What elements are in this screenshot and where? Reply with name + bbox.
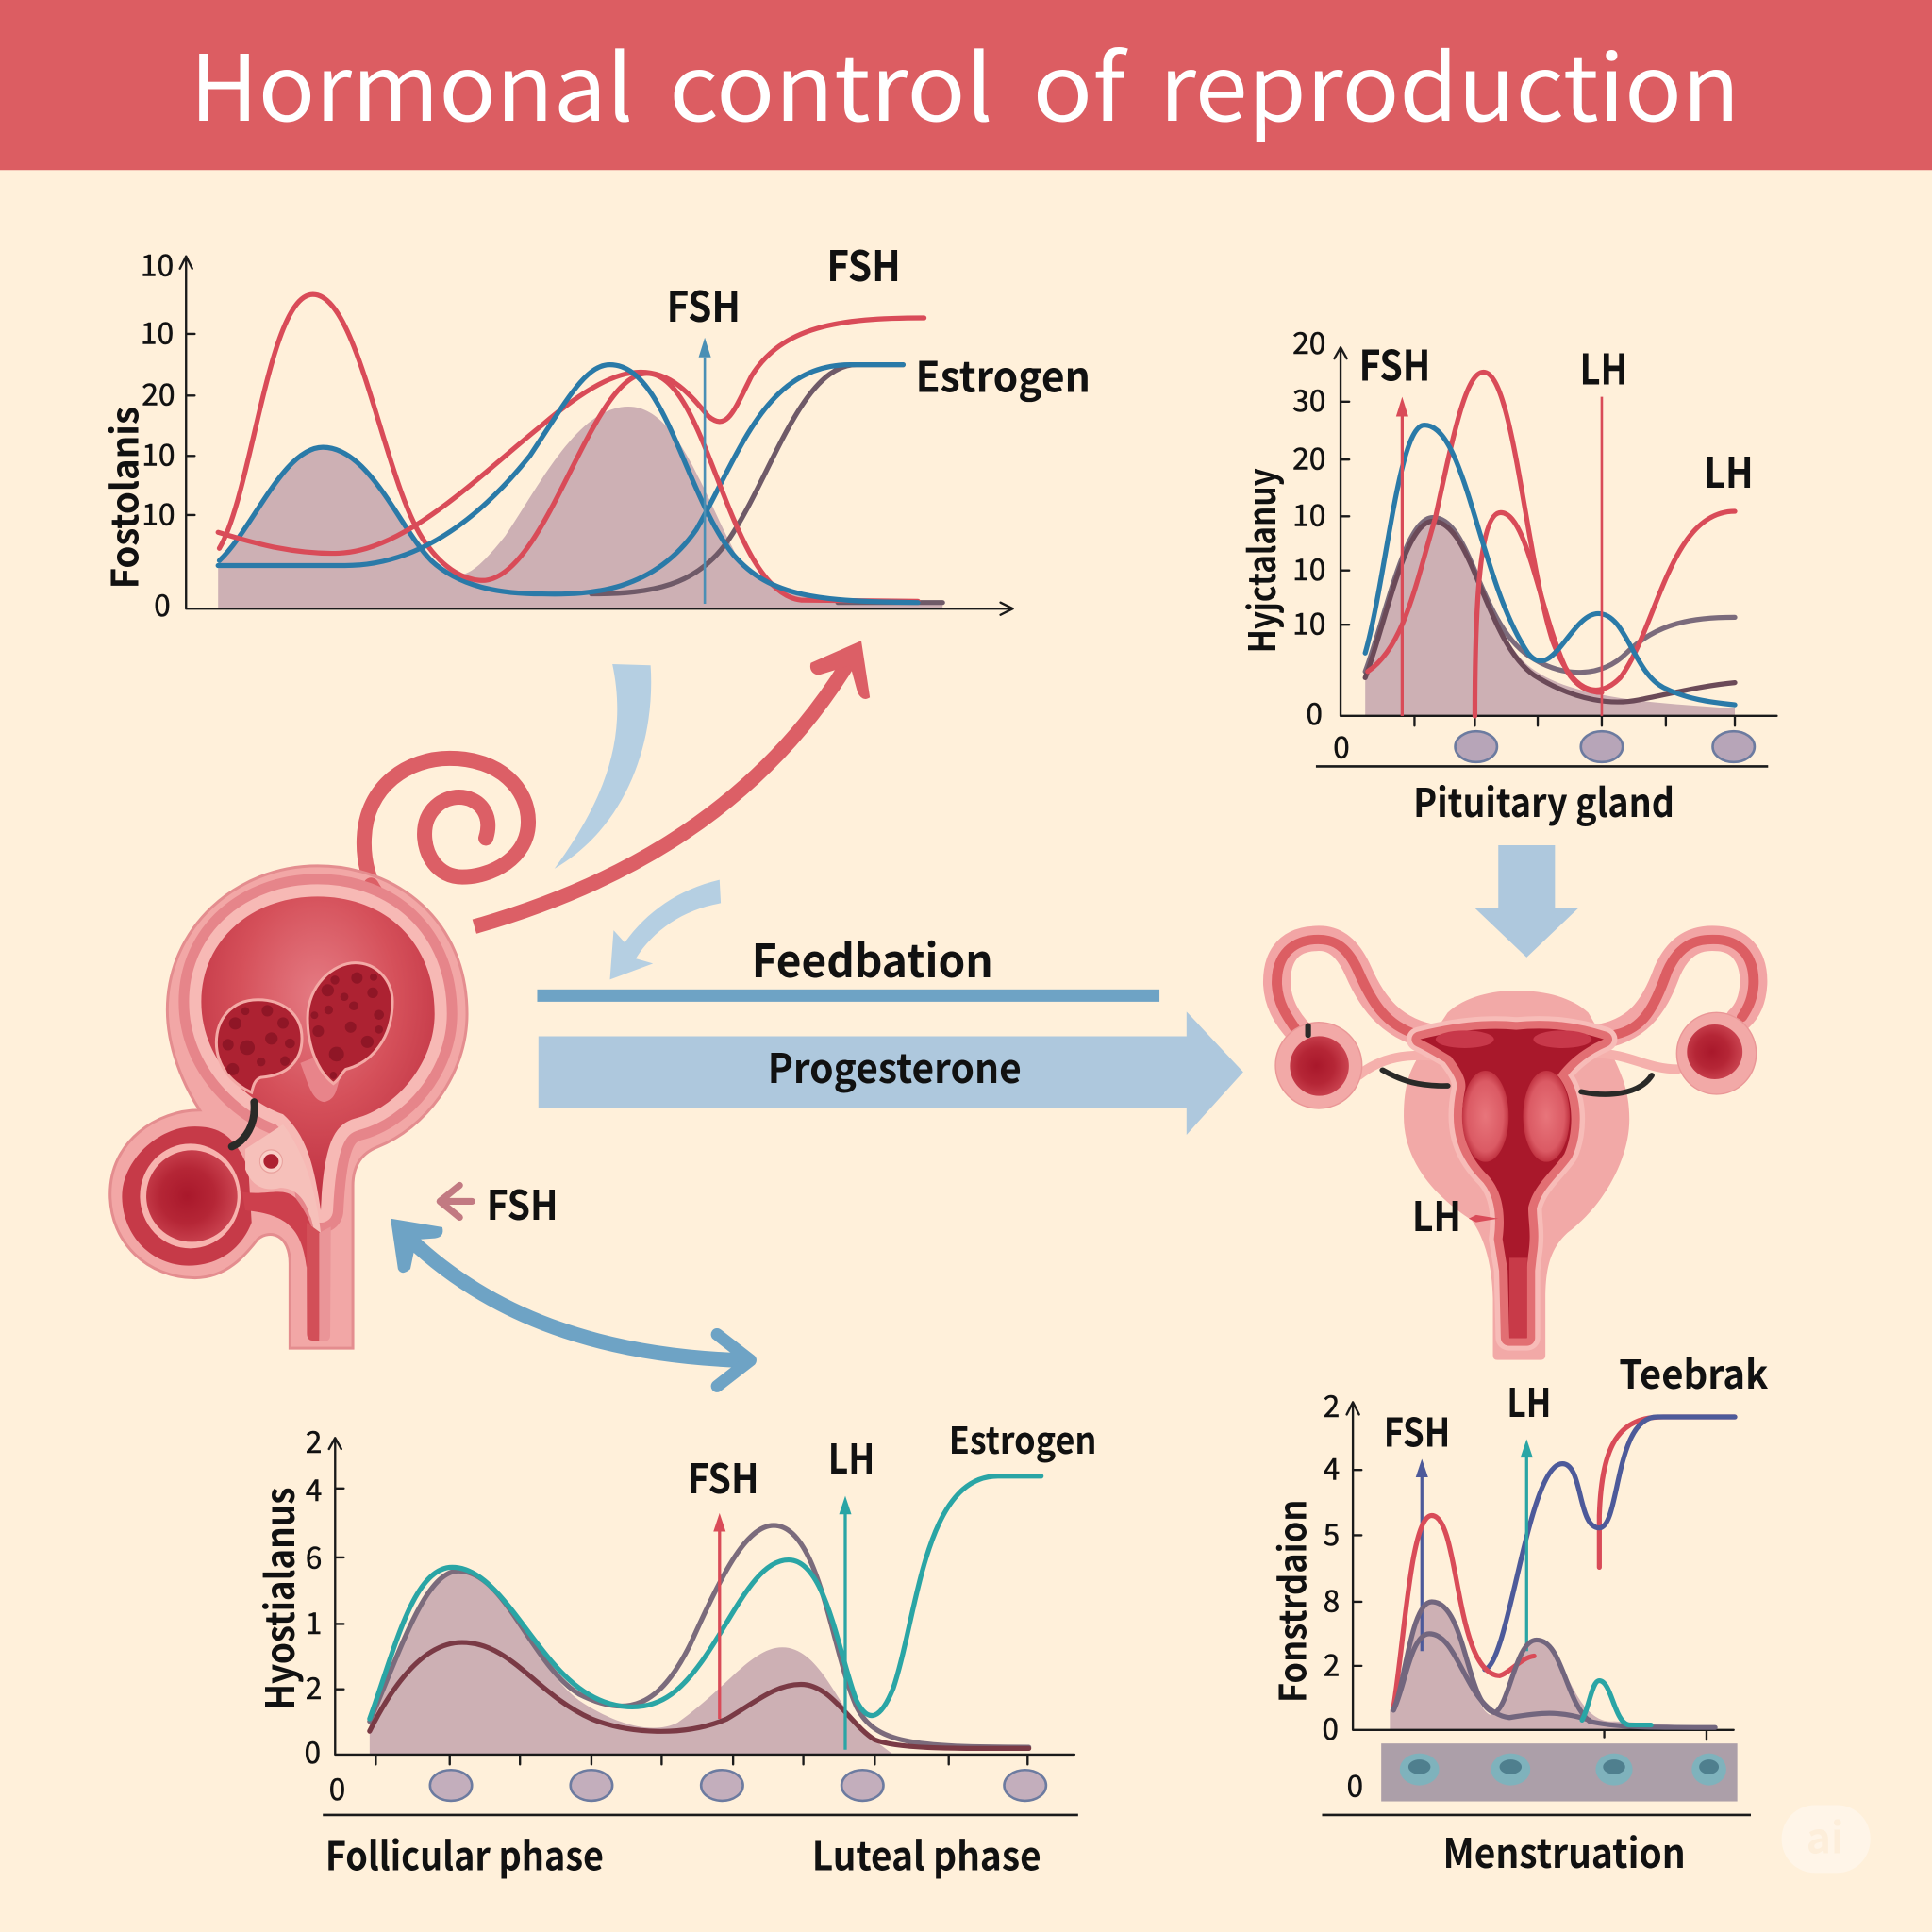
connecting tissue (242, 1191, 314, 1268)
chart: top right pituitary gland curves: 10 (1292, 547, 1325, 590)
title banner: of (1033, 15, 1128, 147)
chart: bottom right menstruation: 5 (1324, 1512, 1340, 1555)
left lobe with follicles (216, 1000, 302, 1092)
icon: dark connectors (1308, 1025, 1652, 1094)
chart: top right pituitary gland curves: FSH (1359, 332, 1430, 393)
canal (307, 1223, 321, 1341)
chart: top right pituitary gland curves: 0 (1306, 691, 1323, 734)
arrow: blue double-headed curve (391, 1219, 750, 1386)
uterus outer body (1404, 991, 1629, 1360)
chart: bottom right menstruation: 8 (1324, 1578, 1340, 1621)
chart: bottom right menstruation: Fonstrdaion (1264, 1500, 1317, 1703)
title banner: reproduction (1159, 15, 1740, 147)
uterine cavity (201, 896, 435, 1210)
endometrial lobes (1462, 1071, 1508, 1162)
chart: top left hormone curves: FSH (667, 273, 741, 334)
chart: top left hormone curves: 10 (141, 310, 174, 353)
chart: top right pituitary gland curves: LH (1704, 439, 1754, 500)
chart: top right pituitary gland curves: 0 (1333, 724, 1350, 767)
watermark badge: ai (1807, 1804, 1844, 1865)
chart: bottom left follicular and luteal phase: Estrogen (949, 1412, 1096, 1465)
ligaments (1358, 1054, 1677, 1075)
icon: spiral tube (364, 758, 528, 897)
arrow: Progesterone block arrow (539, 1011, 1243, 1135)
arrow: Progesterone block arrow: Progesterone (768, 1037, 1022, 1095)
uterine wall layers (1420, 1028, 1604, 1338)
title banner (0, 0, 1932, 170)
label: Feedbation with bar (537, 924, 1159, 1002)
chart: bottom right menstruation: 4 (1324, 1447, 1340, 1490)
chart: top left hormone curves: 0 (154, 583, 171, 625)
chart: top right pituitary gland curves: Hyjctalanuy (1234, 468, 1287, 653)
chart: top right pituitary gland curves: 30 (1292, 378, 1325, 421)
uterine cavity (1420, 1028, 1604, 1338)
label: FSH with small arrow: FSH (487, 1174, 558, 1232)
title banner: Hormonal (190, 15, 633, 147)
chart: top left hormone curves: Estrogen (915, 342, 1091, 404)
chart: bottom right menstruation: FSH (1384, 1402, 1450, 1458)
chart: bottom right menstruation: 0 (1347, 1763, 1363, 1806)
right lobe with follicles (308, 963, 392, 1084)
icon: dark connector (232, 1102, 255, 1146)
chart: bottom left follicular and luteal phase: FSH (688, 1447, 759, 1506)
chart: bottom left follicular and luteal phase: LH (828, 1427, 874, 1486)
chart: bottom right menstruation (1264, 1344, 1768, 1880)
chart: top left hormone curves: 20 (142, 373, 175, 415)
arrow: red curved arrow to top chart (475, 641, 870, 926)
chart: top left hormone curves: 10 (142, 491, 175, 534)
label: FSH with small arrow (440, 1174, 558, 1232)
chart: bottom right menstruation: 2 (1324, 1642, 1340, 1685)
arrow: small light blue feedback arrow (610, 880, 721, 979)
right ovary (1676, 1012, 1757, 1094)
chart: bottom left follicular and luteal phase: 0 (329, 1767, 345, 1809)
chart: top left hormone curves (96, 232, 1091, 625)
chart: bottom right menstruation: Teebrak (1619, 1344, 1768, 1401)
label: LH with small arrow: LH (1412, 1185, 1461, 1243)
chart: bottom left follicular and luteal phase: 0 (305, 1730, 321, 1773)
chart: top left hormone curves: Fostolanis (96, 407, 149, 589)
chart: top right pituitary gland curves: 20 (1292, 437, 1325, 479)
chart: bottom right menstruation: 0 (1322, 1707, 1339, 1749)
chart: top right pituitary gland curves: LH (1579, 336, 1627, 397)
chart: top left hormone curves: 10 (141, 243, 174, 286)
chart: bottom left follicular and luteal phase: 1 (306, 1601, 322, 1643)
chart: bottom right menstruation: LH (1507, 1373, 1551, 1429)
chart: bottom left follicular and luteal phase: Luteal phase (812, 1826, 1041, 1883)
chart: top right pituitary gland curves: 10 (1292, 602, 1325, 644)
spiral tube root over wall (371, 885, 385, 902)
arrow: light blue swoosh (555, 664, 651, 869)
chart: top right pituitary gland curves: Pituitary gland (1413, 773, 1674, 829)
band with cells (1381, 1743, 1738, 1802)
chart: top right pituitary gland curves: 20 (1292, 321, 1325, 363)
chart: top left hormone curves: 10 (142, 433, 175, 475)
label: LH with small arrow (1412, 1185, 1498, 1243)
chart: bottom right menstruation: 2 (1324, 1384, 1340, 1426)
arrow: down block arrow (1474, 845, 1578, 958)
left ovary (1275, 1023, 1362, 1108)
title banner: control (669, 15, 993, 147)
chart: top right pituitary gland curves: 10 (1292, 493, 1325, 536)
chart: top left hormone curves: FSH (826, 232, 901, 293)
label: Feedbation with bar: Feedbation (752, 924, 993, 991)
ovary (122, 1126, 252, 1266)
organ: uterus, tubes and ovaries (1275, 939, 1757, 1360)
chart: bottom left follicular and luteal phase: Hyostialanus (250, 1487, 307, 1710)
chart: bottom left follicular and luteal phase: 2 (306, 1666, 322, 1708)
chart: top right pituitary gland curves (1234, 321, 1776, 829)
chart: bottom left follicular and luteal phase: Follicular phase (325, 1826, 604, 1883)
fallopian tubes (1277, 939, 1754, 1038)
organ outer wall (110, 866, 467, 1348)
chart: bottom left follicular and luteal phase: 2 (306, 1420, 322, 1462)
organ: left reproductive anatomy with spiral (110, 758, 528, 1348)
chart: bottom right menstruation: Menstruation (1442, 1822, 1686, 1880)
cavity wall layers (201, 896, 435, 1210)
watermark badge (1782, 1804, 1871, 1873)
chart: bottom left follicular and luteal phase: 4 (306, 1468, 322, 1510)
chart: bottom left follicular and luteal phase (250, 1412, 1096, 1883)
chart: bottom left follicular and luteal phase: 6 (306, 1536, 322, 1578)
